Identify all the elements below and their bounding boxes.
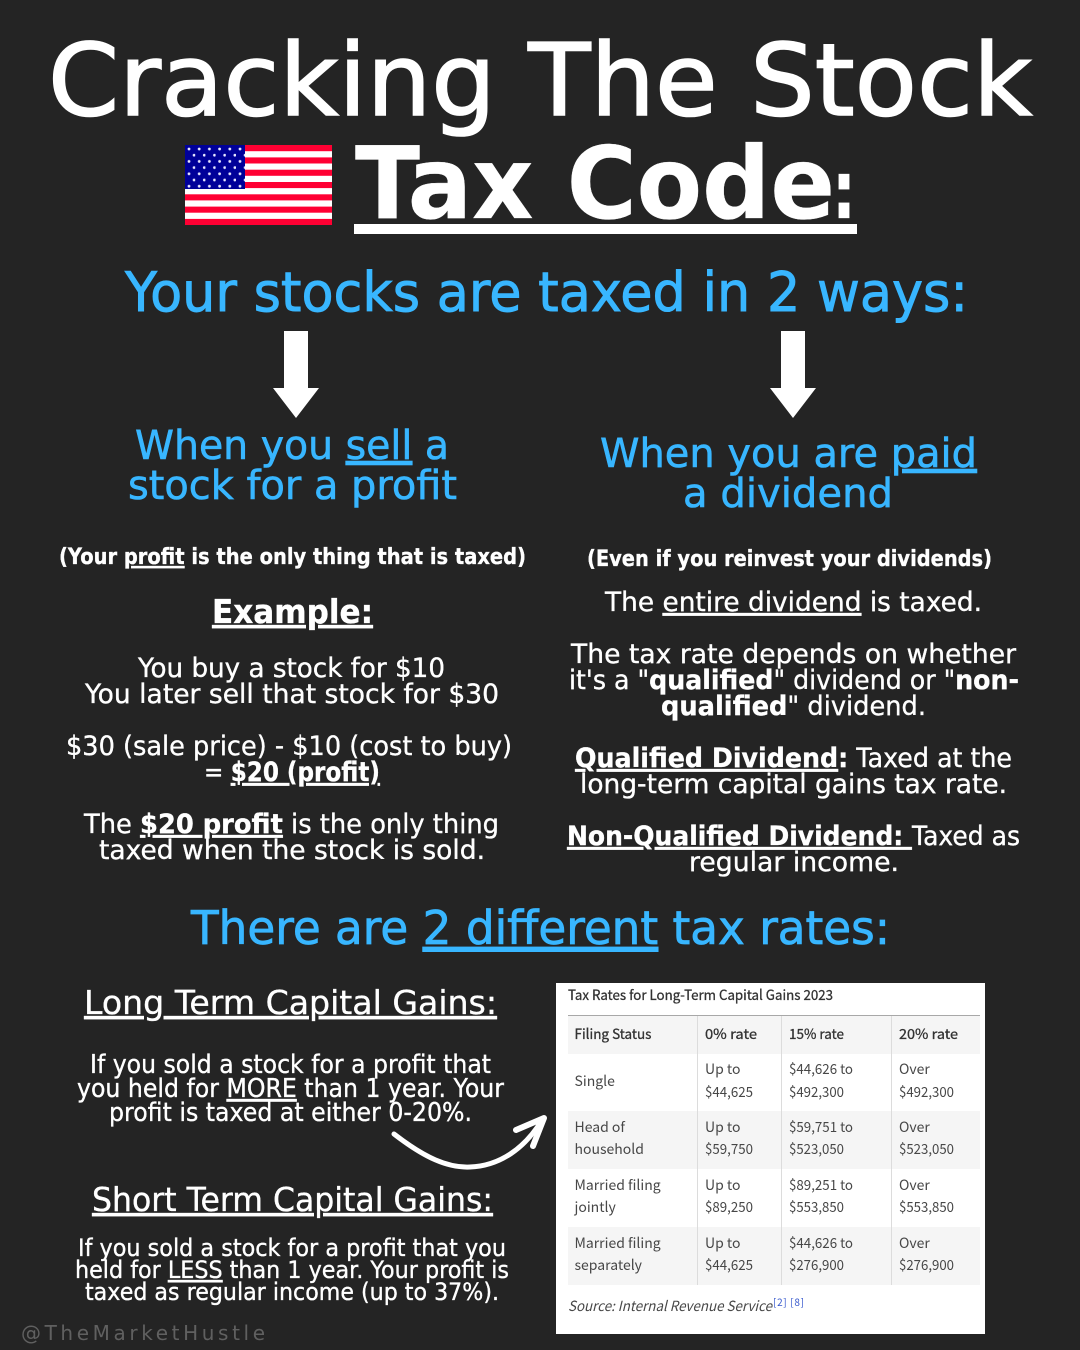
row: married filing jointly: Up to [705, 1175, 740, 1195]
table header: 20% rate [899, 1024, 958, 1044]
heading: when you sell: stock for a profit [128, 463, 457, 509]
row: married filing separately: $44,626 to [789, 1233, 853, 1253]
heading: when you are paid [600, 431, 977, 517]
text block: example buy and sell [84, 653, 499, 710]
row: single: $44,626 to [789, 1059, 853, 1079]
text block: long term explanation [77, 1050, 504, 1128]
heading: long term capital gains: Long Term Capital Gains: [84, 983, 497, 1022]
row: single: Single [574, 1071, 615, 1091]
row: married filing jointly: Over [899, 1175, 930, 1195]
note: profit only taxed: (Your profit is the only thing that is taxed) [59, 545, 526, 570]
row: head of household [574, 1117, 954, 1159]
row: married filing jointly: Married filing [574, 1175, 661, 1195]
table header: Filing Status [574, 1024, 652, 1044]
row: head of household: Over [899, 1117, 930, 1137]
heading: when you are paid: a dividend [683, 471, 893, 517]
row: head of household: Head of [574, 1117, 625, 1137]
text block: long term explanation: profit is taxed at either 0-20%. [109, 1098, 472, 1128]
arrow: left down [273, 331, 319, 418]
row: head of household: $523,050 [789, 1139, 844, 1159]
heading: taxed in 2 ways: Your stocks are taxed in 2 ways: [124, 261, 968, 324]
row: married filing jointly [574, 1175, 954, 1217]
source note: [2] [8] [773, 1294, 804, 1309]
heading: short term capital gains: Short Term Capital Gains: [92, 1180, 493, 1219]
text block: profit taxed: taxed when the stock is sold. [99, 835, 485, 866]
text block: example buy and sell: You buy a stock for $10 [137, 653, 445, 684]
heading: when you sell: When you sell a [135, 423, 449, 469]
row: married filing separately: Over [899, 1233, 930, 1253]
text block: profit taxed: The $20 profit is the only thing [83, 809, 499, 840]
row: married filing separately: Up to [705, 1233, 740, 1253]
row: married filing jointly: $553,850 [899, 1197, 954, 1217]
text block: profit calculation [66, 731, 512, 788]
text block: profit calculation: $30 (sale price) - $10 (cost to buy) [66, 731, 512, 762]
text block: entire dividend: The entire dividend is taxed. [604, 587, 982, 618]
icon: US flag [185, 145, 332, 225]
row: married filing jointly: $553,850 [789, 1197, 844, 1217]
table header [574, 1024, 958, 1044]
text block: tax rate depends: qualified" dividend. [661, 691, 926, 722]
arrow: curved to table [394, 1118, 544, 1167]
note: reinvest dividends: (Even if you reinvest your dividends) [587, 547, 992, 572]
row: head of household: $523,050 [899, 1139, 954, 1159]
row: married filing jointly: $89,250 [705, 1197, 753, 1217]
text block: tax rate depends: The tax rate depends on whether [570, 639, 1017, 670]
row: single: $492,300 [899, 1082, 954, 1102]
row: head of household: $59,751 to [789, 1117, 853, 1137]
text block: qualified dividend: Qualified Dividend: Taxed at the [575, 743, 1012, 774]
row: married filing separately [574, 1233, 954, 1275]
row: married filing jointly: $89,251 to [789, 1175, 853, 1195]
title: : [832, 144, 856, 237]
text block: example buy and sell: You later sell that stock for $30 [84, 679, 499, 710]
source note: Source: Internal Revenue Service [568, 1296, 773, 1316]
row: married filing separately: $276,900 [899, 1255, 954, 1275]
text block: non-qualified dividend: Non-Qualified Dividend: Taxed as [567, 821, 1020, 852]
row: single: $492,300 [789, 1082, 844, 1102]
heading: example: Example: [212, 592, 373, 631]
row: head of household: household [574, 1139, 644, 1159]
heading: 2 different tax rates: There are 2 different tax rates: [190, 901, 890, 955]
title [48, 22, 1032, 242]
text block: short term explanation: taxed as regular income (up to 37%). [85, 1278, 499, 1306]
text block: profit taxed [83, 809, 499, 866]
text block: qualified dividend [575, 743, 1012, 800]
heading: when you are paid: When you are paid [600, 431, 977, 477]
row: married filing jointly: jointly [574, 1197, 616, 1217]
row: single: $44,625 [705, 1082, 753, 1102]
row: married filing separately: Married filing [574, 1233, 661, 1253]
row: head of household: $59,750 [705, 1139, 753, 1159]
text block: long term explanation: you held for MORE than 1 year. Your [77, 1074, 504, 1104]
arrow: right down [770, 331, 816, 418]
title: Cracking The Stock [48, 22, 1032, 139]
text block: profit calculation: = $20 (profit) [204, 757, 380, 788]
text block: short term explanation: If you sold a stock for a profit that you [78, 1234, 506, 1262]
table header: 0% rate [705, 1024, 757, 1044]
row: single: Over [899, 1059, 930, 1079]
text block: non-qualified dividend [567, 821, 1020, 878]
table header: 15% rate [789, 1024, 844, 1044]
text block: tax rate depends [569, 639, 1019, 722]
watermark: @TheMarketHustle [21, 1321, 265, 1345]
row: married filing separately: $276,900 [789, 1255, 844, 1275]
row: married filing separately: $44,625 [705, 1255, 753, 1275]
text block: qualified dividend: long-term capital gains tax rate. [580, 769, 1007, 800]
row: single: Up to [705, 1059, 740, 1079]
table title: Tax Rates for Long-Term Capital Gains 2023 [568, 985, 833, 1005]
row: married filing separately: separately [574, 1255, 643, 1275]
text block: short term explanation [75, 1234, 509, 1306]
text block: tax rate depends: it's a "qualified" dividend or "non- [569, 665, 1019, 696]
text block: short term explanation: held for LESS than 1 year. Your profit is [75, 1256, 509, 1284]
text block: non-qualified dividend: regular income. [689, 847, 899, 878]
row: head of household: Up to [705, 1117, 740, 1137]
panel: tax rates table [556, 983, 985, 1334]
title: Tax Code [355, 125, 835, 242]
text block: long term explanation: If you sold a stock for a profit that [90, 1050, 491, 1080]
row: single [574, 1059, 954, 1102]
heading: when you sell [128, 423, 457, 509]
